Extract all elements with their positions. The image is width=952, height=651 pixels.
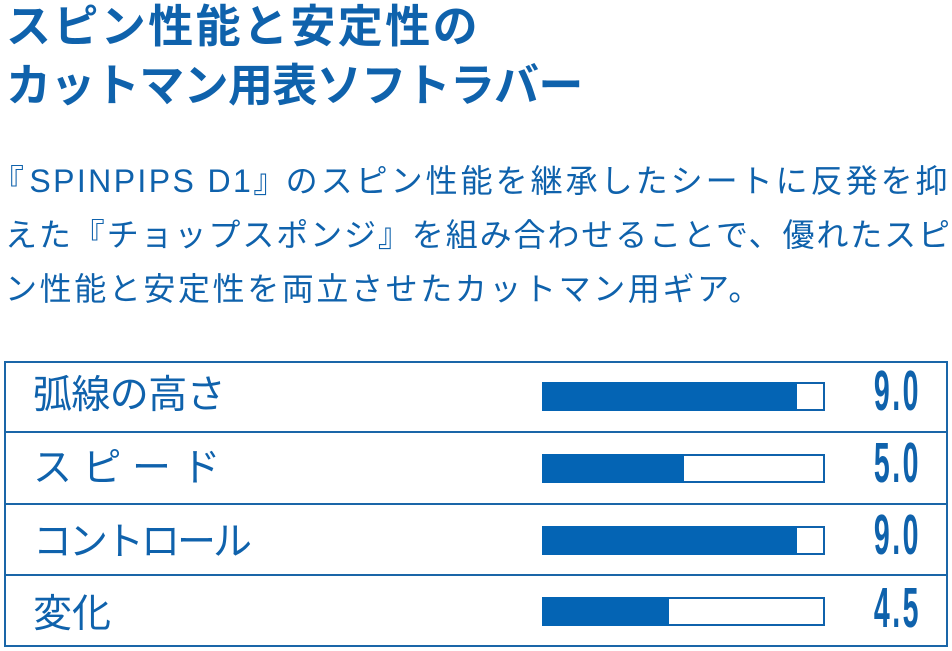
row: arc height: 9.0 [874, 359, 921, 423]
row: speed [33, 431, 921, 495]
title [6, 1, 583, 111]
row: variation [33, 576, 921, 640]
title: スピン性能と安定性の [6, 1, 480, 52]
row: speed: スピード [33, 447, 231, 490]
row: control: 9.0 [874, 503, 921, 567]
row: control [33, 503, 921, 567]
description text [0, 163, 952, 307]
row: speed: 5.0 [874, 431, 921, 495]
row: arc height [33, 359, 921, 423]
title: カットマン用表ソフトラバー [6, 60, 583, 111]
description text: えた『チョップスポンジ』を組み合わせることで、優れたスピ [5, 217, 952, 253]
ratings table [4, 359, 948, 647]
row: variation: 変化 [33, 593, 111, 636]
row: control: コントロール [33, 521, 249, 564]
row: variation: 4.5 [874, 576, 921, 640]
description text: ン性能と安定性を両立させたカットマン用ギア。 [5, 271, 763, 307]
row: arc height: 弧線の高さ [33, 374, 225, 417]
description text: 『SPINPIPS D1』のスピン性能を継承したシートに反発を抑 [0, 163, 951, 199]
